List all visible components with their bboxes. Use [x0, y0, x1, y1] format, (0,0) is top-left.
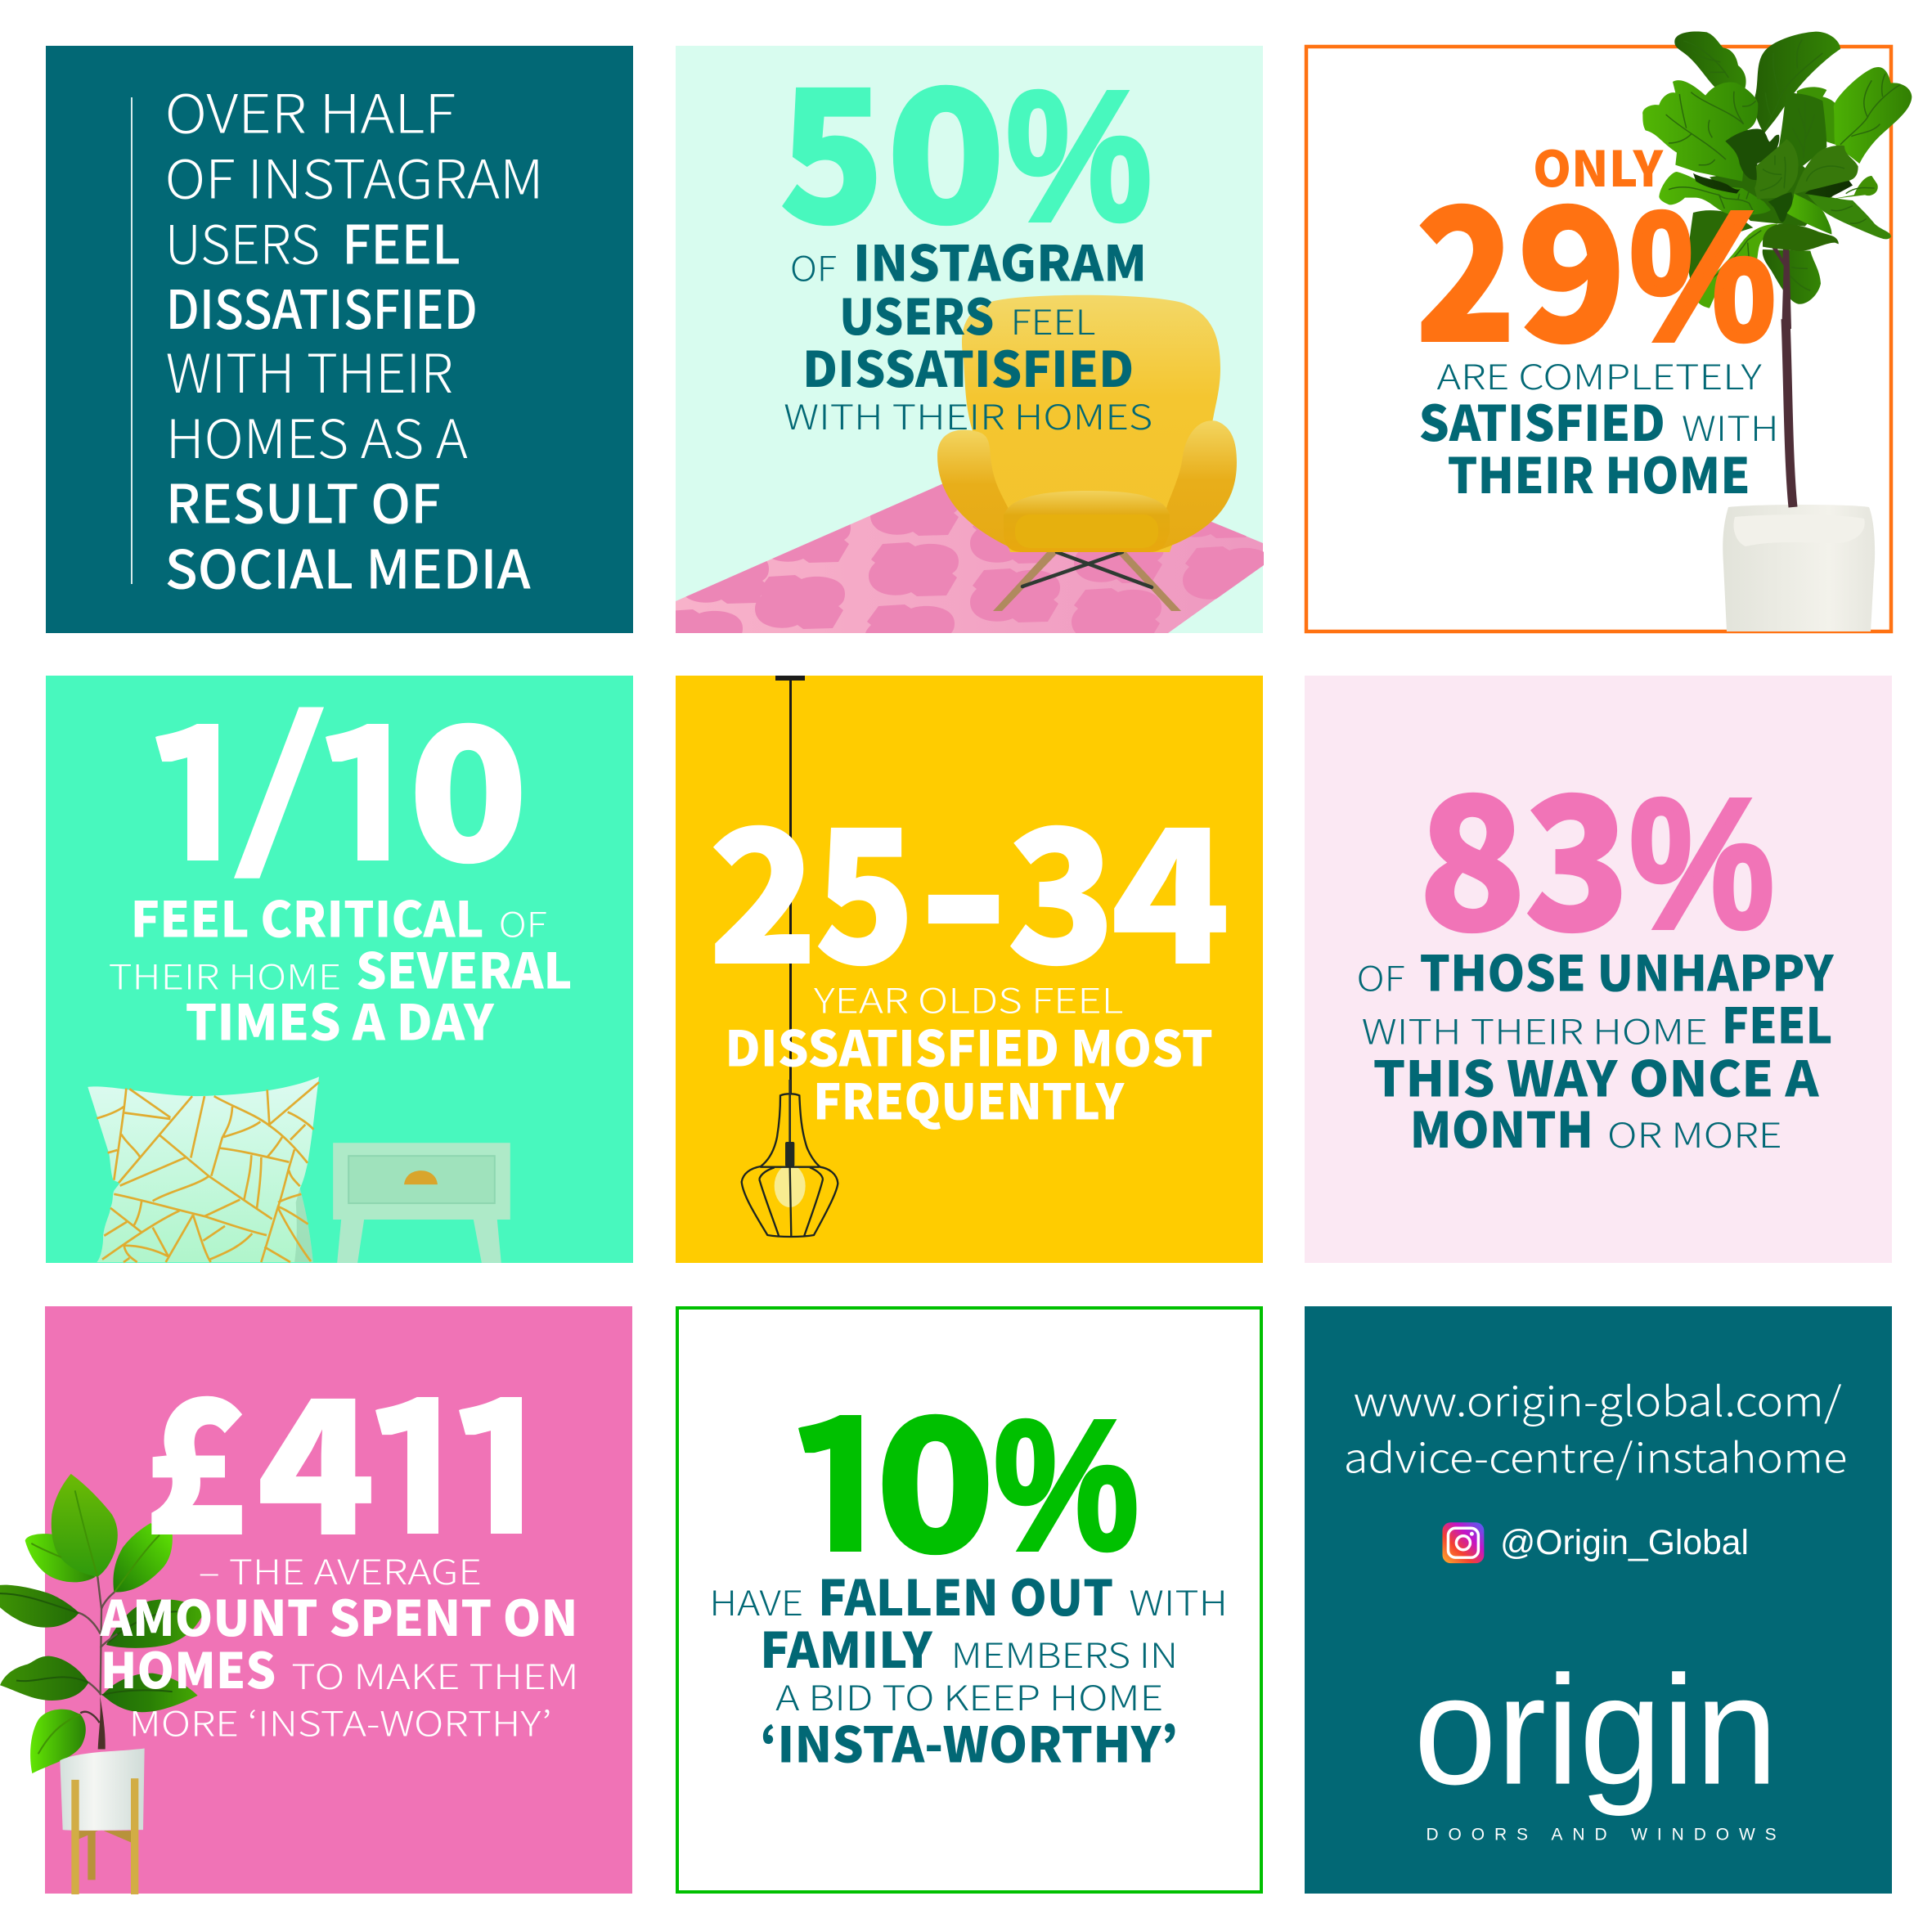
- big figure: 83%: 3: [1524, 717, 1630, 984]
- caption text: FALLEN OUT: [818, 1560, 1113, 1630]
- big figure: 10%: %: [995, 1386, 1138, 1585]
- caption text: THEIR HOME: [109, 950, 341, 1000]
- caption text: MEMBERS IN: [951, 1629, 1178, 1678]
- statement text: FEEL: [342, 202, 461, 279]
- statement text: USERS: [165, 202, 320, 279]
- caption text: [100, 1545, 579, 1747]
- caption text: MONTH: [1410, 1092, 1593, 1162]
- caption text: USERS: [839, 279, 995, 349]
- statement text: OVER HALF: [165, 72, 456, 149]
- caption text: THOSE UNHAPPY: [1420, 936, 1834, 1006]
- big figure: 25-34: 2: [708, 749, 818, 1017]
- panel: 10 percent fallen out: [677, 1308, 1261, 1892]
- big figure: 83%: %: [1630, 765, 1773, 964]
- statement text: RESULT OF: [166, 462, 441, 539]
- big figure: 10%: 1: [776, 1338, 915, 1606]
- illustration: yellow armchair: [937, 295, 1237, 611]
- caption text: HAVE: [709, 1576, 803, 1626]
- caption text: YEAR OLDS FEEL: [814, 974, 1123, 1024]
- text: only: ONLY: [1533, 130, 1665, 201]
- caption text: [725, 974, 1213, 1134]
- big figure: 50%: 0: [886, 9, 1006, 276]
- caption text: OF: [790, 241, 837, 291]
- caption text: THIS WAY ONCE A: [1373, 1040, 1819, 1111]
- big figure: 1/10: /: [234, 666, 325, 926]
- caption text: MORE ‘INSTA-WORTHY’: [129, 1697, 552, 1747]
- big figure: 50%: 5: [779, 9, 885, 276]
- caption text: TIMES A DAY: [186, 984, 494, 1054]
- big figure: 83%: 8: [1418, 717, 1527, 984]
- caption text: FEEL CRITICAL: [131, 882, 484, 952]
- caption text: A BID TO KEEP HOME: [775, 1671, 1163, 1721]
- caption text: THEIR HOME: [1447, 438, 1750, 508]
- caption text: FAMILY: [760, 1612, 932, 1683]
- big figure: 1/10: [155, 707, 522, 878]
- caption text: [784, 225, 1152, 440]
- caption text: DISSATISFIED: [802, 331, 1134, 402]
- panel: age group 25-34: [676, 676, 1263, 1263]
- big figure: 25-34: 3: [1007, 749, 1116, 1017]
- caption text: OF: [499, 898, 547, 948]
- panel: 83 percent of those unhappy: [1305, 676, 1892, 1263]
- caption text: WITH: [1129, 1576, 1228, 1626]
- big figure: 411 pounds: 4: [257, 1320, 375, 1588]
- logo: origin: DOORS AND WINDOWS: [1427, 1825, 1777, 1844]
- illustration: patterned rug: [676, 484, 1264, 633]
- website address: [1344, 1370, 1847, 1485]
- illustration: fiddle leaf plant: [1642, 31, 1912, 507]
- caption text: FEEL: [1722, 987, 1833, 1058]
- caption text: WITH: [1682, 402, 1779, 452]
- big figure: 1/10: 1: [303, 647, 443, 914]
- illustration: pendant lamp: [742, 676, 838, 1237]
- big figure: 25-34: 4: [1111, 749, 1230, 1017]
- big figure: 25-34: –: [924, 749, 1003, 1017]
- big figure: 83%: [1418, 717, 1773, 984]
- website address: advice-centre/instahome: [1344, 1426, 1847, 1485]
- caption text: WITH THEIR HOME: [1362, 1004, 1708, 1054]
- big figure: 411 pounds: £: [143, 1320, 247, 1588]
- big figure: 29%: [1415, 128, 1775, 395]
- caption text: INSTAGRAM: [853, 225, 1147, 295]
- statement text: SOCIAL MEDIA: [165, 528, 531, 604]
- caption text: OF: [1357, 952, 1405, 1002]
- website address: www.origin-global.com/: [1354, 1370, 1842, 1429]
- illustration: potted plant: [0, 1474, 204, 1894]
- caption text: HOMES: [101, 1633, 276, 1703]
- panel: over half of Instagram users: [46, 46, 633, 633]
- caption text: OR MORE: [1607, 1108, 1782, 1158]
- caption text: ‘INSTA-WORTHY’: [760, 1707, 1178, 1777]
- illustration: cushion: [88, 1076, 319, 1262]
- statement text: DISSATISFIED: [166, 267, 478, 344]
- caption text: SEVERAL: [356, 933, 573, 1004]
- big figure: 29%: 2: [1415, 128, 1516, 395]
- caption text: [1357, 936, 1834, 1162]
- caption text: – THE AVERAGE: [199, 1545, 482, 1595]
- caption text: SATISFIED: [1419, 385, 1665, 456]
- statement text: [165, 72, 544, 604]
- illustration: pot: [1723, 505, 1875, 631]
- caption text: WITH THEIR HOMES: [784, 390, 1152, 440]
- big figure: 10%: 0: [875, 1338, 995, 1606]
- caption text: [109, 882, 573, 1054]
- statement text: OF INSTAGRAM: [165, 137, 544, 214]
- caption text: FREQUENTLY: [813, 1063, 1125, 1134]
- big figure: 10%: [798, 1413, 1137, 1556]
- big figure: 1/10: 0: [408, 647, 528, 914]
- big figure: 411 pounds: 1: [437, 1320, 576, 1588]
- big figure: 25-34: [708, 749, 1230, 1017]
- panel: website and logo: [1305, 1306, 1892, 1894]
- big figure: 25-34: 5: [815, 749, 915, 1017]
- big figure: 50%: %: [1007, 57, 1151, 256]
- statement text: HOMES AS A: [166, 397, 468, 474]
- big figure: 1/10: 1: [133, 647, 272, 914]
- caption text: AMOUNT SPENT ON: [100, 1580, 578, 1651]
- panel: only 29 percent satisfied: [1306, 31, 1912, 631]
- illustration: side table: [333, 1143, 510, 1263]
- logo: origin: origin: [1414, 1644, 1778, 1817]
- caption text: FEEL: [1011, 295, 1095, 345]
- big figure: 50%: [779, 9, 1151, 276]
- caption text: [1419, 350, 1779, 508]
- big figure: 29%: 9: [1516, 128, 1627, 395]
- panel: 50 percent dissatisfied: [676, 46, 1264, 633]
- panel: one in ten feel critical: [46, 647, 633, 1263]
- caption text: ARE COMPLETELY: [1436, 350, 1762, 400]
- caption text: [709, 1560, 1228, 1777]
- caption text: DISSATISFIED MOST: [725, 1010, 1213, 1081]
- statement text: WITH THEIR: [166, 331, 453, 408]
- big figure: 29%: %: [1630, 177, 1775, 376]
- caption text: TO MAKE THEM: [291, 1650, 579, 1700]
- big figure: 411 pounds: 1: [353, 1320, 492, 1588]
- panel: 411 pounds spent: [0, 1306, 632, 1894]
- big figure: 411 pounds: [151, 1395, 522, 1534]
- icon: instagram: [1442, 1522, 1484, 1563]
- instagram handle: @Origin_Global: [1500, 1523, 1749, 1562]
